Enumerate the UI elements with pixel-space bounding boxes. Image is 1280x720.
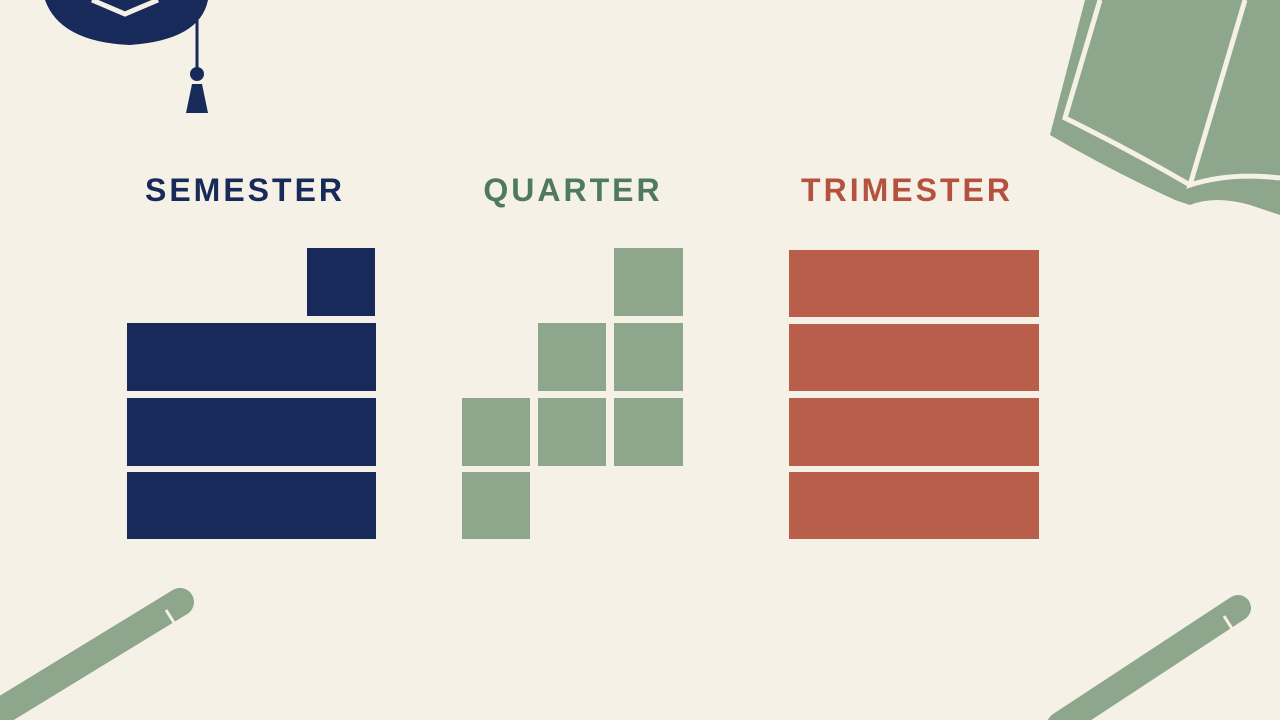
chart: trimester blocks	[789, 250, 1039, 539]
icon: open book	[1050, 0, 1280, 215]
chart: semester blocks	[127, 248, 376, 539]
heading: quarter: QUARTER	[483, 172, 663, 208]
heading: semester: SEMESTER	[145, 172, 345, 208]
icon: pencil right	[1060, 608, 1238, 720]
heading: trimester: TRIMESTER	[801, 172, 1013, 208]
chart: quarter blocks	[462, 248, 683, 539]
icon: graduation cap	[45, 0, 208, 113]
icon: pencil left	[0, 602, 180, 712]
